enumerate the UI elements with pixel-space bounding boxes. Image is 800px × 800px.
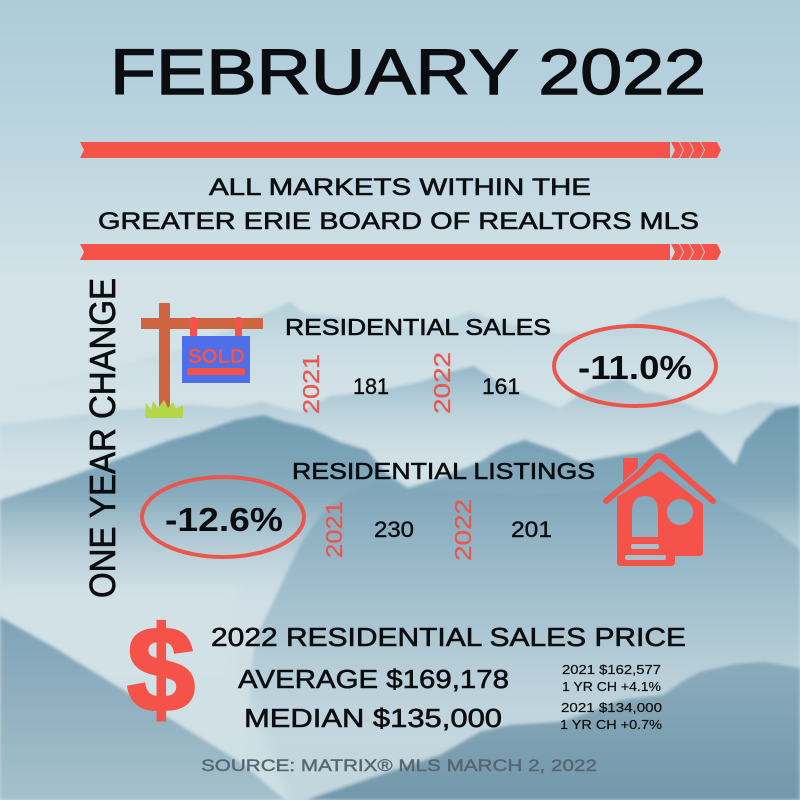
residential sales figures: 2021 [298, 354, 324, 414]
median price: MEDIAN $135,000 [244, 703, 502, 733]
arrow banner: top [80, 142, 721, 158]
subtitle: ALL MARKETS WITHIN THE [209, 174, 591, 201]
median price comparison: 2021 $134,000 [561, 700, 662, 715]
icon: sold sign: SOLD [188, 346, 245, 368]
average price: AVERAGE $169,178 [238, 664, 509, 694]
icon: sold sign [141, 303, 263, 418]
source note: SOURCE: MATRIX® MLS MARCH 2, 2022 [201, 756, 597, 775]
residential sales heading: RESIDENTIAL SALES [285, 314, 551, 340]
residential listings figures: 2021 [321, 501, 347, 558]
average price comparison [562, 662, 661, 694]
side heading: one year change: ONE YEAR CHANGE [82, 278, 123, 598]
average price comparison: 1 YR CH +4.1% [562, 679, 661, 694]
subtitle [98, 174, 699, 235]
median price comparison [560, 700, 662, 732]
icon: dollar sign: $ [127, 601, 195, 737]
residential listings figures: 2022 [450, 499, 476, 561]
residential listings heading: RESIDENTIAL LISTINGS [292, 458, 595, 484]
residential sales figures: 181 [353, 374, 389, 399]
icon: house [606, 456, 713, 566]
residential listings figures [321, 499, 552, 561]
sales price heading: 2022 RESIDENTIAL SALES PRICE [211, 622, 686, 652]
title: FEBRUARY 2022 [110, 36, 706, 108]
callout: sales change: -11.0% [578, 349, 692, 386]
residential listings figures: 230 [374, 517, 414, 542]
callout: listings change [142, 477, 304, 557]
residential sales figures: 161 [482, 374, 520, 399]
average price comparison: 2021 $162,577 [562, 662, 661, 677]
residential sales figures [298, 352, 520, 414]
callout: sales change [554, 326, 716, 406]
callout: listings change: -12.6% [165, 501, 283, 538]
arrow banner: bottom [80, 244, 721, 260]
residential sales figures: 2022 [429, 352, 455, 414]
subtitle: GREATER ERIE BOARD OF REALTORS MLS [98, 208, 699, 235]
median price comparison: 1 YR CH +0.7% [560, 717, 662, 732]
residential listings figures: 201 [511, 517, 552, 542]
